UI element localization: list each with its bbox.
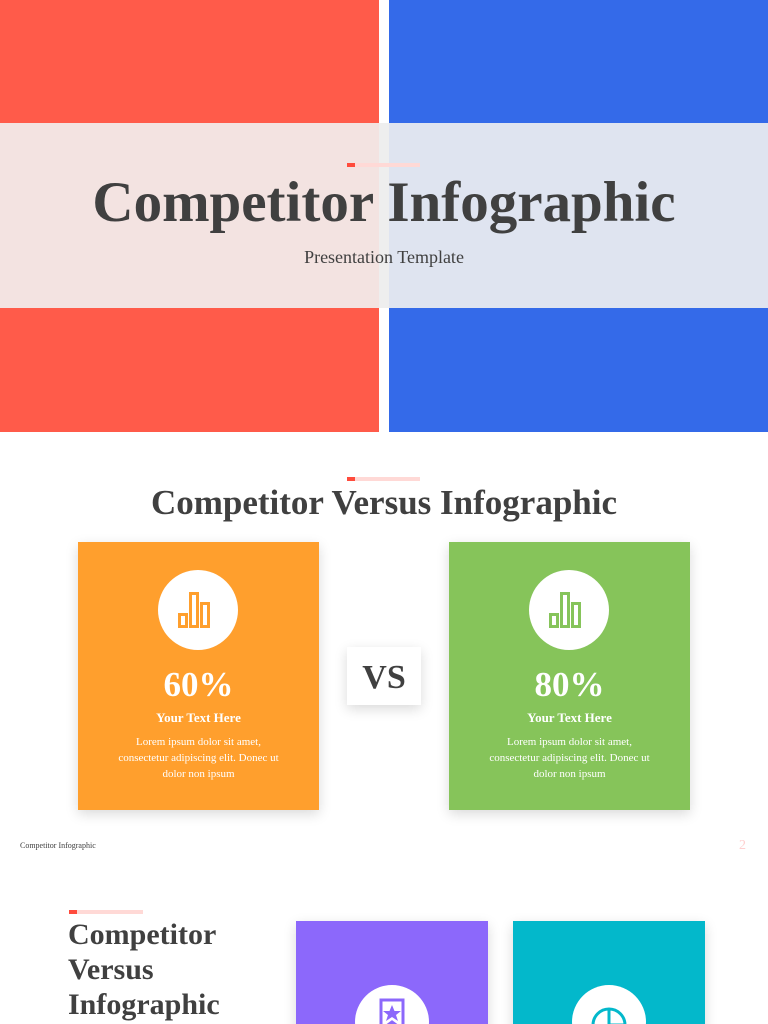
icon: bar chart: [158, 570, 238, 650]
label: Your Text Here: [156, 710, 241, 725]
accent bar 2: [347, 477, 420, 481]
VS box: [347, 647, 421, 705]
hero blue block: [389, 0, 768, 432]
body text: [489, 736, 650, 780]
heading 3: [68, 918, 220, 1021]
value: 80%: [534, 665, 604, 704]
footer label: Competitor Infographic: [20, 841, 96, 850]
hero red block: [0, 0, 379, 432]
body text: dolor non ipsum: [162, 768, 235, 780]
title: Competitor Infographic: [92, 171, 676, 234]
icon: pie chart: [572, 985, 646, 1024]
card: orange 60%: [78, 542, 319, 810]
body text: consectetur adipiscing elit. Donec ut: [489, 752, 650, 764]
heading 3: Competitor: [68, 918, 216, 951]
body text: dolor non ipsum: [533, 768, 606, 780]
icon: bar chart: [529, 570, 609, 650]
value: 60%: [164, 665, 234, 704]
body text: Lorem ipsum dolor sit amet,: [507, 736, 632, 748]
card: purple: [296, 921, 488, 1024]
VS box: VS: [362, 659, 406, 696]
heading 2: Competitor Versus Infographic: [151, 483, 617, 522]
accent bar 3: [69, 910, 143, 914]
hero band: [0, 123, 768, 308]
heading 3: Infographic: [68, 988, 220, 1021]
body text: Lorem ipsum dolor sit amet,: [136, 736, 261, 748]
card: teal: [513, 921, 705, 1024]
label: Your Text Here: [527, 710, 612, 725]
accent bar: [347, 163, 420, 167]
icon: bookmark star: [355, 985, 429, 1024]
page number: 2: [739, 838, 746, 853]
body text: consectetur adipiscing elit. Donec ut: [118, 752, 279, 764]
card: green 80%: [449, 542, 690, 810]
heading 3: Versus: [68, 953, 154, 986]
subtitle: Presentation Template: [304, 247, 464, 267]
body text: [118, 736, 279, 780]
